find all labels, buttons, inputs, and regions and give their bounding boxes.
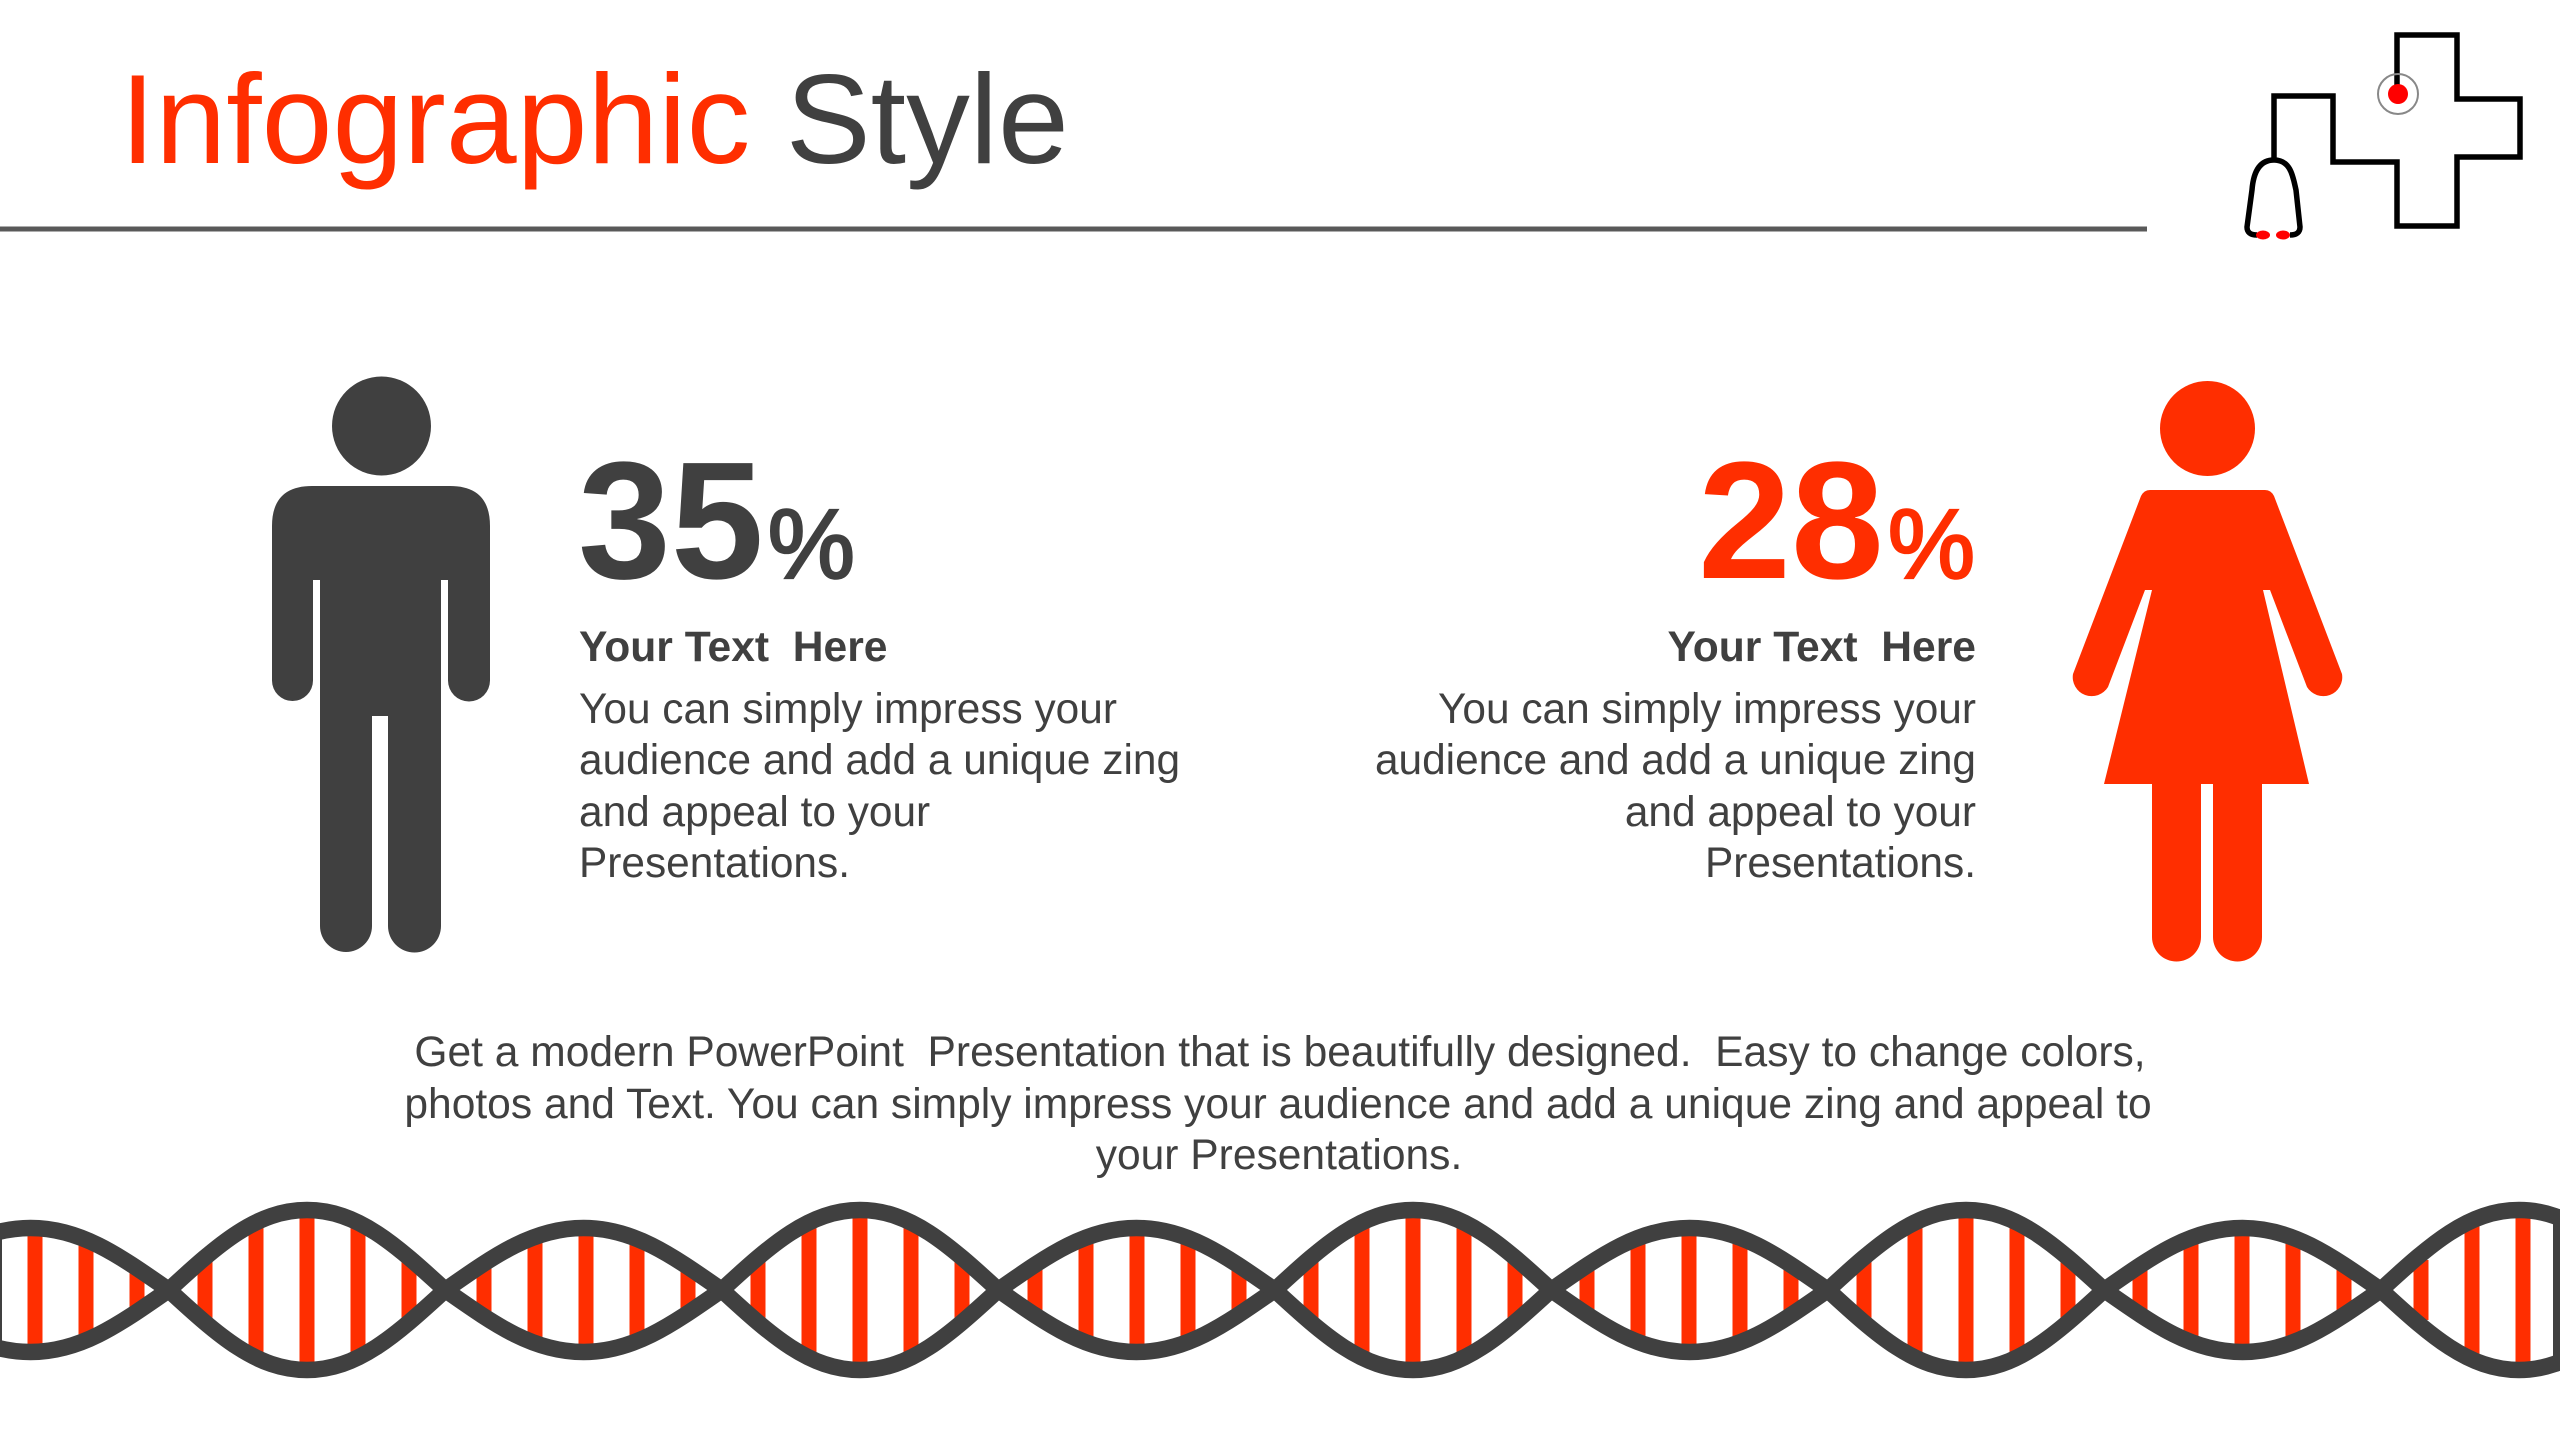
stat block: 28 percent xyxy=(1375,428,1976,886)
stat block: 35 percent: You can simply impress your xyxy=(579,685,1117,732)
stat block: 35 percent: and appeal to your xyxy=(579,788,930,835)
description paragraph xyxy=(404,1028,2152,1179)
DNA helix xyxy=(0,1210,2560,1370)
icon: female figure xyxy=(2073,381,2342,961)
description paragraph: photos and Text. You can simply impress your audience and add a unique zing and appeal to xyxy=(404,1080,2152,1128)
description paragraph: Get a modern PowerPoint Presentation that is beautifully designed. Easy to change colors, xyxy=(414,1028,2146,1076)
header rule xyxy=(0,226,2147,232)
stat block: 28 percent: and appeal to your xyxy=(1625,788,1976,835)
description paragraph: your Presentations. xyxy=(1096,1131,1462,1179)
stat block: 35 percent: 35% xyxy=(578,428,855,614)
icon: male figure xyxy=(272,376,490,953)
stat block: 28 percent: Presentations. xyxy=(1705,839,1976,886)
stat block: 35 percent: audience and add a unique zing xyxy=(579,736,1180,783)
stat block: 28 percent: Your Text Here xyxy=(1668,623,1976,671)
stat block: 28 percent: audience and add a unique zing xyxy=(1375,736,1976,783)
stat block: 35 percent: Presentations. xyxy=(579,839,850,886)
title: Infographic Style xyxy=(120,48,1069,190)
stat block: 28 percent: 28% xyxy=(1698,428,1975,614)
stat block: 35 percent: Your Text Here xyxy=(579,623,888,671)
icon: stethoscope cross xyxy=(2247,35,2520,240)
stat block: 28 percent: You can simply impress your xyxy=(1438,685,1976,732)
stat block: 35 percent xyxy=(578,428,1180,886)
